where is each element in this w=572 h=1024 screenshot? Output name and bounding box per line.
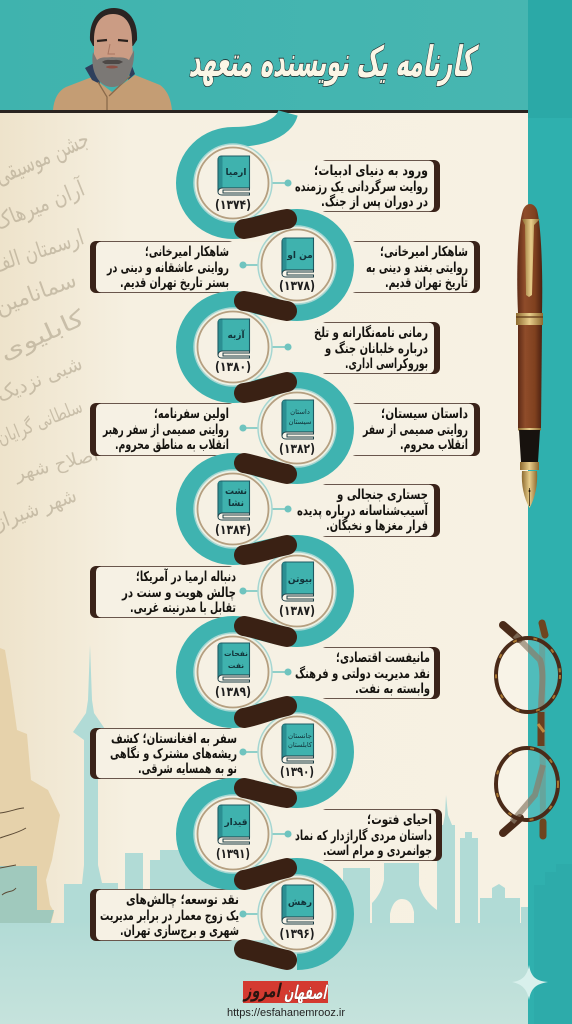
book badge: جانستان کابلستان: (۱۳۹۰) <box>280 765 314 780</box>
callout: 1389 <box>270 647 440 699</box>
book badge: نفحات نفت <box>194 633 272 711</box>
callout: 1384 <box>270 484 440 537</box>
book badge: نفحات نفت: نفحات <box>224 649 248 658</box>
callout: 1396: یک زوج معمار در برابر مدیریت <box>100 908 239 924</box>
callout: 1382 right: انقلاب محروم. <box>400 437 468 453</box>
book badge: رهش: (۱۳۹۶) <box>280 927 314 942</box>
book badge: جانستان کابلستان: جانستان <box>288 732 312 740</box>
callout: 1384: فرار مغزها و نخبگان. <box>326 517 428 534</box>
callout: 1378 left: بستر تاریخ تهران قدیم. <box>120 275 229 291</box>
callout: 1380: بوروکراسی اداری. <box>345 356 428 372</box>
book badge: نشت نشا <box>194 470 272 548</box>
callout: 1378 right: تاریخ تهران قدیم. <box>385 275 468 291</box>
callout: 1374: ورود به دنیای ادبیات؛ <box>314 163 428 179</box>
serpentine timeline ribbon <box>186 113 344 960</box>
callout: 1374 <box>270 160 440 212</box>
book badge: قیدار: (۱۳۹۱) <box>216 847 250 862</box>
book badge: نفحات نفت: (۱۳۸۹) <box>215 685 251 700</box>
callout: 1374: در دوران پس از جنگ. <box>321 193 428 210</box>
logo: Esfahan Emrooz: اصفهان <box>283 981 330 1004</box>
callout: 1387: دنباله ارمیا در آمریکا؛ <box>136 568 236 585</box>
callout: 1389: مانیفست اقتصادی؛ <box>336 650 430 666</box>
callout: 1378 right: روایتی بغند و دینی به <box>366 260 468 276</box>
book badge: آزبه: (۱۳۸۰) <box>215 360 251 375</box>
callout: 1396 <box>90 889 265 941</box>
callout: 1389: نقد مدیریت دولتی و فرهنگ <box>295 665 430 682</box>
book badge: رهش: رهش <box>288 898 312 908</box>
faded calligraphy background <box>0 125 100 535</box>
right teal strip <box>528 0 572 1024</box>
callout: 1374: روایت سرگردانی یک رزمنده <box>295 178 428 195</box>
book badge: رهش <box>258 875 336 953</box>
book badge: ارمیا <box>194 144 272 222</box>
book badge: آزبه: آزبه <box>227 329 245 341</box>
book badge: من او: (۱۳۷۸) <box>279 279 315 294</box>
logo: Esfahan Emrooz: امروز <box>242 979 284 1002</box>
torn old paper <box>0 648 60 1024</box>
callout: 1378 left: شاهکار امیرخانی؛ <box>145 244 229 260</box>
callout: 1378 right: شاهکار امیرخانی؛ <box>380 244 468 260</box>
ribbon clasps <box>244 219 287 960</box>
book badge: قیدار <box>194 795 272 873</box>
book badge: نشت نشا: (۱۳۸۴) <box>215 523 251 538</box>
callout: 1382 left <box>90 403 265 456</box>
callout: 1391 <box>270 809 442 861</box>
callout: 1387: تقابل با مدرنیته غربی. <box>130 600 236 616</box>
website url: https://esfahanemrooz.ir <box>227 1007 345 1019</box>
faded calligraphy background: اصلاح شهر <box>12 444 100 485</box>
callout: 1384: آسیب‌شناسانه درباره پدیده <box>297 502 428 519</box>
eyeglasses <box>496 620 560 836</box>
header band <box>0 0 528 110</box>
book badge: من او <box>258 226 336 304</box>
book badge: داستان سیستان: سیستان <box>289 418 312 426</box>
book badge: بیوتن: (۱۳۸۷) <box>279 604 315 619</box>
logo: Esfahan Emrooz <box>242 979 330 1004</box>
callout: 1382 left: انقلاب به مناطق محروم. <box>115 437 229 453</box>
book badge: نفحات نفت: نفت <box>228 661 244 670</box>
callout: 1378 left <box>90 241 265 293</box>
book badge: ارمیا: ارمیا <box>226 168 246 178</box>
connectors <box>240 180 291 917</box>
book badge: من او: من او <box>286 251 313 261</box>
callout: 1387 <box>90 566 265 618</box>
callout: 1391: احیای فتوت؛ <box>367 812 432 828</box>
callout: 1382 right: داستان سیستان؛ <box>381 406 468 422</box>
book badge: جانستان کابلستان: کابلستان <box>288 741 313 749</box>
callout: 1382 left: روایتی صمیمی از سفر رهبر <box>102 422 229 438</box>
callout: 1396: نقد توسعه؛ چالش‌های <box>126 892 239 908</box>
callout: 1380 <box>270 322 440 374</box>
callout: 1389: وابسته به نفت. <box>355 681 430 697</box>
header rule <box>0 110 528 113</box>
book badge: داستان سیستان: داستان <box>290 408 310 416</box>
callout: 1382 right <box>335 403 480 456</box>
callout: 1390: نو به همسایه شرقی. <box>138 761 237 777</box>
Tehran skyline silhouette <box>0 645 528 1024</box>
book badge: بیوتن <box>258 552 336 630</box>
book badge: بیوتن: بیوتن <box>288 575 312 585</box>
callout: 1390 <box>90 728 265 779</box>
callout: 1390: ریشه‌های مشترک و نگاهی <box>110 745 237 762</box>
portrait of the author <box>53 8 172 110</box>
callout: 1380: درباره خلبانان جنگ و <box>324 340 428 357</box>
sparkle <box>512 965 548 1000</box>
book badge: آزبه <box>194 308 272 386</box>
callout: 1382 left: اولین سفرنامه؛ <box>154 406 229 422</box>
fountain pen <box>516 204 543 508</box>
book badge: ارمیا: (۱۳۷۴) <box>215 198 251 213</box>
book badge: نشت نشا: نشا <box>228 499 244 509</box>
callout: 1396: شهری و برج‌سازی تهران. <box>120 923 239 939</box>
callout: 1378 right <box>335 241 480 293</box>
book badge: نشت نشا: نشت <box>225 487 247 497</box>
callout: 1378 left: روایتی عاشقانه و دینی در <box>106 260 229 276</box>
callout: 1380: رمانی نامه‌نگارانه و تلخ <box>314 324 428 341</box>
callout: 1390: سفر به افغانستان؛ کشف <box>111 731 237 747</box>
callout: 1387: چالش هویت و سنت در <box>121 585 236 601</box>
callout: 1391: جوانمردی و مرام است. <box>323 843 432 859</box>
callout: 1391: داستان مردی گاراژدار که نماد <box>295 827 432 844</box>
callout: 1382 right: روایتی صمیمی از سفر <box>362 422 468 438</box>
book badge: جانستان کابلستان <box>258 713 336 791</box>
book badge: داستان سیستان: (۱۳۸۲) <box>279 442 315 457</box>
book badge: داستان سیستان <box>258 389 336 467</box>
book badge: قیدار: قیدار <box>223 818 248 828</box>
callout: 1384: جستاری جنجالی و <box>336 487 428 503</box>
